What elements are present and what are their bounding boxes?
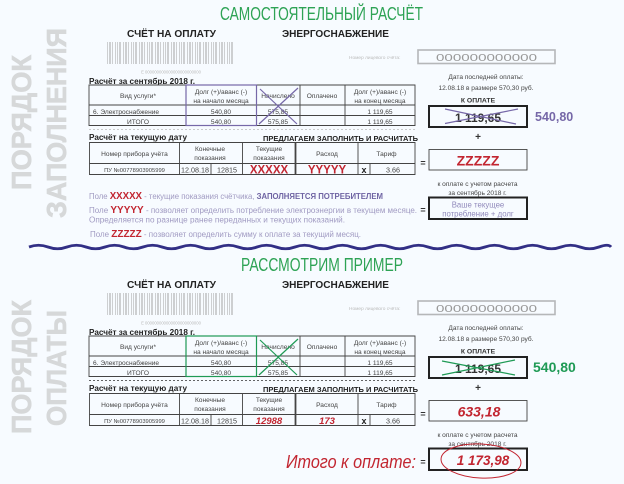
- explanation xxxxx: Поле XXXXX - текущие показания счётчика, ЗАПОЛНЯЕТСЯ ПОТРЕБИТЕЛЕМ: [89, 191, 383, 202]
- meter table: 12815: [217, 416, 237, 426]
- current date heading: Расчёт на текущую дату: [89, 133, 188, 142]
- meter table: [90, 142, 415, 176]
- last payment note: 12.08.18 в размере 570,30 руб.: [438, 335, 534, 343]
- account number box: 000000000000: [436, 304, 538, 315]
- september table: Вид услуги*: [120, 93, 156, 100]
- zzzzz box: [429, 150, 527, 170]
- plus sign: +: [475, 132, 481, 143]
- september table: на начало месяца: [193, 349, 249, 356]
- september table: 540,80: [211, 370, 231, 377]
- meter table: 173: [319, 416, 336, 427]
- vertical label: порядок оплаты: ОПЛАТЫ: [41, 310, 72, 426]
- to pay box crossed: [429, 106, 527, 127]
- to pay box crossed: [429, 357, 527, 378]
- to pay box crossed: 1 119,65: [455, 362, 501, 376]
- last payment note: Дата последней оплаты:: [448, 73, 524, 81]
- september table: 575,85: [268, 109, 288, 116]
- meter table: x: [361, 416, 367, 426]
- september table: Долг (+)/аванс (-): [195, 89, 247, 96]
- last payment note: Дата последней оплаты:: [448, 324, 524, 332]
- account number label: Номер лицевого счёта:: [349, 306, 400, 312]
- account number box: [418, 301, 555, 315]
- last payment note: 12.08.18 в размере 570,30 руб.: [438, 84, 534, 92]
- meter table: 12.08.18: [181, 166, 209, 174]
- meter table: Расход: [316, 151, 338, 158]
- to pay box crossed: 1 119,65: [455, 111, 501, 125]
- meter table: ПУ №00778903905999: [104, 168, 165, 174]
- invoice heading: СЧЁТ НА ОПЛАТУ: [127, 27, 216, 40]
- barcode: [107, 293, 235, 315]
- meter table: Конечные: [195, 146, 225, 153]
- corrected debt value: 540,80: [535, 110, 573, 124]
- meter table: Расход: [316, 402, 338, 409]
- explanation yyyyy: Поле YYYYY - позволяет определить потребление электроэнергии в текущем месяце.: [89, 205, 417, 216]
- meter table: показания: [253, 155, 285, 162]
- note with calc: к оплате с учетом расчета: [437, 432, 518, 439]
- september table: Начислено: [261, 93, 295, 100]
- september table: 6. Электроснабжение: [93, 359, 159, 367]
- meter table: Тариф: [376, 402, 397, 409]
- note with calc: к оплате с учетом расчета: [437, 181, 518, 188]
- meter table: показания: [194, 406, 226, 413]
- meter table: 3.66: [386, 166, 400, 174]
- fill-in heading: ПРЕДЛАГАЕМ ЗАПОЛНИТЬ И РАСЧИТАТЬ: [263, 136, 418, 143]
- september table: 1 119,65: [367, 119, 393, 126]
- fill-in heading: ПРЕДЛАГАЕМ ЗАПОЛНИТЬ И РАСЧИТАТЬ: [263, 387, 418, 394]
- title: рассмотрим пример: РАССМОТРИМ ПРИМЕР: [241, 255, 403, 275]
- last payment note: [438, 324, 534, 343]
- total label: Итого к оплате:: [286, 452, 416, 472]
- account number box: 000000000000: [436, 53, 538, 64]
- dashed divider: [89, 128, 417, 130]
- wavy divider: [29, 245, 611, 249]
- september table: Долг (+)/аванс (-): [195, 340, 247, 347]
- corrected debt value: 540,80: [533, 359, 576, 375]
- note with calc: за сентябрь 2018 г.: [448, 189, 507, 197]
- meter table: Текущие: [256, 146, 283, 153]
- september table: 575,85: [268, 119, 288, 126]
- september calc heading: Расчёт за сентябрь 2018 г.: [89, 328, 195, 337]
- debt column highlight: [186, 336, 256, 376]
- equals sign: =: [420, 409, 426, 419]
- september table: на конец месяца: [354, 349, 406, 356]
- september table: Оплачено: [307, 93, 338, 100]
- total box: потребление + долг: [442, 210, 514, 218]
- barcode number: E 000000000000000000000000: [141, 320, 202, 326]
- barcode: [107, 42, 235, 64]
- september table: на конец месяца: [354, 98, 406, 105]
- september calc heading: Расчёт за сентябрь 2018 г.: [89, 77, 195, 86]
- to pay heading: К ОПЛАТЕ: [461, 98, 496, 104]
- meter table: 3.66: [386, 416, 400, 426]
- september table: на начало месяца: [193, 98, 249, 105]
- september table: 1 119,65: [367, 370, 393, 377]
- meter table: Тариф: [376, 151, 397, 158]
- barcode number: E 000000000000000000000000: [141, 70, 202, 74]
- explanation yyyyy line 2: Определяется по разнице ранее переданных и текущих показаний.: [89, 216, 345, 224]
- equals sign: =: [420, 457, 426, 467]
- meter table: Текущие: [256, 397, 283, 404]
- september table: Начислено: [261, 344, 295, 351]
- meter table: 12988: [256, 416, 283, 427]
- meter table: Номер прибора учёта: [101, 150, 168, 158]
- september table: [89, 85, 415, 126]
- september table: [89, 336, 415, 377]
- plus sign: +: [475, 383, 481, 394]
- invoice form: first section: [89, 27, 573, 219]
- debt column highlight: [186, 85, 256, 126]
- total box: Ваше текущее: [452, 200, 504, 210]
- total box: [429, 448, 527, 470]
- crossed-out accrued column: [259, 339, 298, 375]
- september table: ИТОГО: [127, 370, 149, 377]
- meter table: XXXXX: [250, 164, 289, 176]
- september table: Вид услуги*: [120, 344, 156, 351]
- september table: 540,80: [211, 109, 231, 116]
- vertical label: порядок заполнения: ПОРЯДОК: [6, 54, 37, 190]
- note with calc: за сентябрь 2018 г.: [448, 440, 507, 448]
- meter table: YYYYY: [308, 164, 347, 176]
- account number label: Номер лицевого счёта:: [349, 55, 400, 61]
- consumption result box: [429, 400, 527, 421]
- meter table: 12.08.18: [181, 416, 209, 426]
- current date heading: Расчёт на текущую дату: [89, 384, 188, 393]
- september table: 540,80: [211, 360, 231, 367]
- september table: 6. Электроснабжение: [93, 108, 159, 116]
- note with calc: [437, 432, 518, 448]
- september table: Долг (+)/аванс (-): [354, 340, 406, 347]
- consumption result box: 633,18: [458, 404, 501, 420]
- vertical label: порядок оплаты: [6, 299, 72, 434]
- account number box: [418, 50, 555, 64]
- title: самостоятельный расчёт: САМОСТОЯТЕЛЬНЫЙ РАСЧЁТ: [220, 3, 423, 24]
- september table: 575,85: [268, 370, 288, 377]
- dashed divider: [89, 380, 417, 382]
- crossed-out accrued column: [259, 88, 298, 124]
- meter table: показания: [194, 155, 226, 162]
- meter table: [90, 394, 415, 427]
- to pay heading: К ОПЛАТЕ: [461, 348, 496, 356]
- equals sign: =: [420, 205, 426, 215]
- invoice form: example section: [89, 278, 576, 480]
- vertical label: порядок заполнения: [6, 28, 72, 218]
- equals sign: =: [420, 158, 426, 168]
- vertical label: порядок оплаты: ПОРЯДОК: [6, 299, 37, 434]
- last payment note: [438, 73, 534, 92]
- explanation text: [89, 191, 417, 240]
- september table: 575,85: [268, 360, 288, 367]
- september table: 1 119,65: [367, 360, 393, 367]
- supply heading: ЭНЕРГОСНАБЖЕНИЕ: [282, 279, 389, 291]
- september table: 1 119,65: [367, 109, 393, 116]
- supply heading: ЭНЕРГОСНАБЖЕНИЕ: [282, 28, 389, 40]
- explanation zzzzz: Поле ZZZZZ - позволяет определить сумму к оплате за текущий месяц.: [90, 229, 361, 240]
- meter table: x: [361, 165, 367, 175]
- total box: 1 173,98: [457, 453, 510, 468]
- meter table: Номер прибора учёта: [101, 401, 168, 409]
- vertical label: порядок заполнения: ЗАПОЛНЕНИЯ: [41, 28, 72, 218]
- september table: Долг (+)/аванс (-): [354, 89, 406, 96]
- meter table: показания: [253, 406, 285, 413]
- september table: Оплачено: [307, 344, 338, 351]
- meter table: Конечные: [195, 397, 225, 404]
- september table: ИТОГО: [127, 119, 149, 126]
- september table: 540,80: [211, 119, 231, 126]
- red circle around total: [440, 442, 522, 480]
- meter table: 12815: [217, 166, 237, 174]
- note with calc: [437, 181, 518, 197]
- zzzzz box: ZZZZZ: [457, 152, 500, 168]
- invoice heading: СЧЁТ НА ОПЛАТУ: [127, 278, 216, 291]
- total box: [429, 198, 527, 219]
- meter table: ПУ №00778903905999: [104, 419, 165, 425]
